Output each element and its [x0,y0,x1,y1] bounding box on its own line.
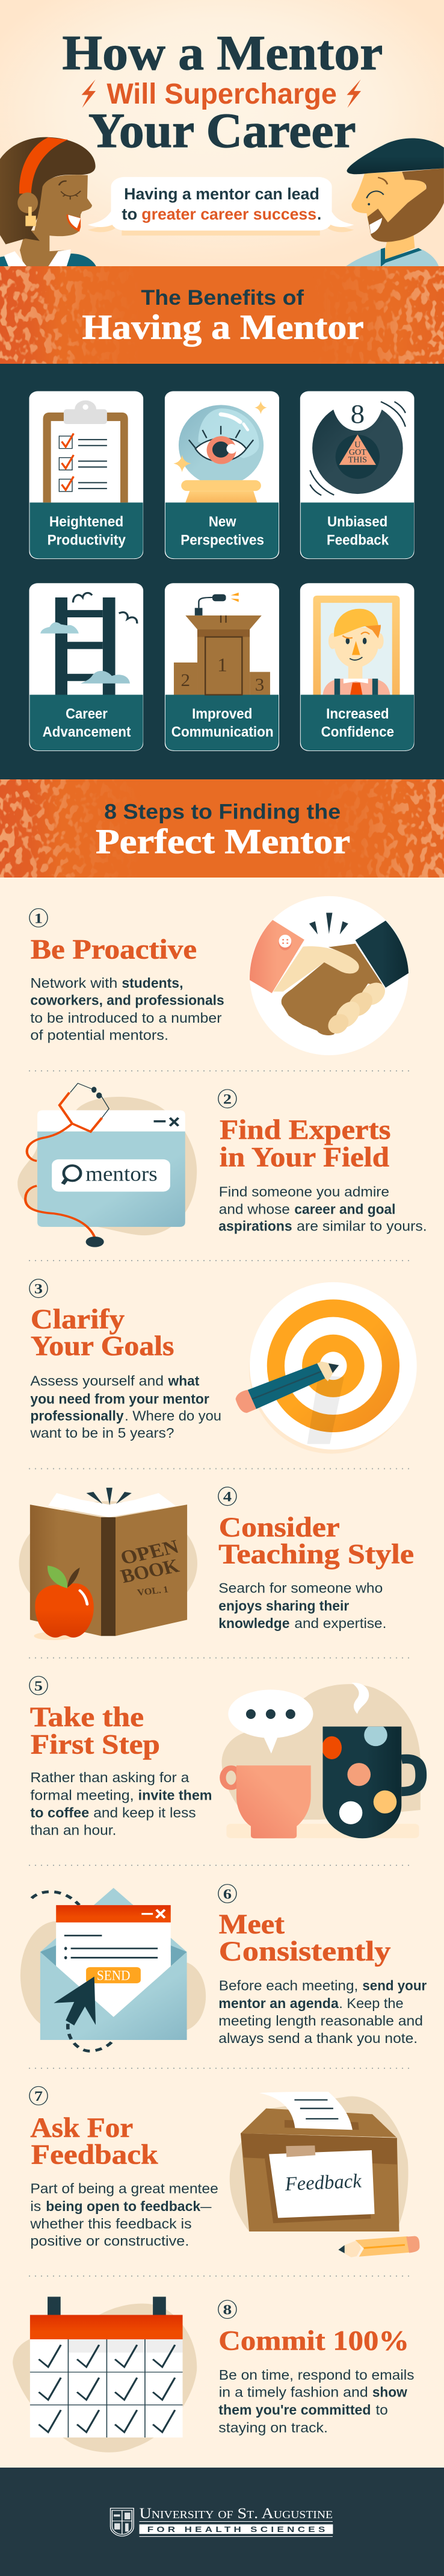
icon: podium with microphone: 3 [255,675,264,694]
step 5: Take the First Step [29,1676,421,1838]
step body: to coffee [30,1804,89,1821]
step title [30,2112,158,2170]
icon: right lightning bolt [347,80,361,108]
step body [218,1977,427,2046]
logo: university crest [111,2508,134,2536]
step body: show [372,2384,407,2400]
label [180,514,264,548]
label: Unbiased [327,514,387,530]
step title: Consider [219,1512,340,1543]
illustration: feedback box: Feedback [284,2169,362,2195]
heading: 8 Steps to Finding the: 8 Steps to Finding the [104,800,341,823]
card: New Perspectives [165,391,279,559]
step body: Find someone you admire [219,1184,389,1200]
step body: Rather than asking for a [30,1770,190,1786]
icon: magic 8-ball: GOT [349,448,366,457]
step body: Before each meeting, [219,1977,358,1994]
step body: — [200,2198,212,2214]
number badge 2 [218,1090,236,1108]
step body: Part of being a great mentee [30,2180,218,2197]
label: Confidence [321,725,394,740]
step title: First Step [31,1729,160,1760]
step body: aspirations [218,1218,292,1234]
number badge 5: 5 [34,1678,43,1694]
speech text [122,186,321,223]
step body: is [30,2198,41,2214]
number badge 1 [29,909,48,927]
step title: Consistently [219,1936,390,1967]
icon: target with pencil [236,1282,417,1454]
step 6: Meet Consistently [20,1885,427,2051]
label: Productivity [48,532,126,548]
number badge 4: 4 [223,1489,232,1505]
step body: than an hour. [30,1822,116,1838]
step body [218,1580,386,1631]
step body: what [168,1373,200,1389]
illustration: open book with apple: BOOK [118,1555,182,1587]
step body: always send a thank you note. [218,2030,418,2046]
number badge 4 [218,1487,236,1506]
icon: magic 8-ball: THIS [348,455,367,464]
step body: and keep it less [93,1804,196,1821]
card: Heightened Productivity [29,391,143,559]
illustration: email envelope: SEND [97,1967,130,1983]
step body [218,1184,427,1234]
step body: mentor an agenda [218,1995,339,2012]
step title: Take the [30,1701,144,1733]
step title [220,1114,390,1173]
step title [219,1909,390,1967]
label: Increased [326,706,389,722]
step body: enjoys sharing their [218,1598,349,1614]
step body: . Keep the [339,1995,404,2012]
step body: whether this feedback is [29,2216,192,2231]
step body: formal meeting, [30,1787,134,1803]
heading: Perfect Mentor: Perfect Mentor [96,823,350,861]
step body: of potential mentors. [30,1027,168,1043]
illustration: search window with stethoscope: mentors [85,1162,158,1185]
step body: positive or constructive. [30,2233,189,2249]
card: Unbiased Feedback [300,391,414,559]
illustration: calendar [13,2297,197,2453]
step body [30,1770,212,1838]
step title: Clarify [31,1303,125,1335]
icon: magic 8-ball [310,399,405,495]
label [327,514,389,548]
number badge 7: 7 [34,2089,43,2104]
step title [218,1512,414,1570]
icon: small pencil [338,2236,419,2257]
icon: magic 8-ball: U [354,440,361,449]
step title [31,1303,174,1362]
icon: podium with microphone [174,593,270,695]
step body [30,975,224,1043]
heading: Having a Mentor: Having a Mentor [82,308,364,347]
speech text: Having a mentor can lead [124,186,319,203]
label: New [209,514,236,530]
step title: Teaching Style [218,1539,414,1570]
speech text: to [122,205,137,223]
step body: knowledge [218,1615,289,1631]
label: Feedback [327,532,389,548]
step body: being open to feedback [46,2198,201,2214]
step title: Be Proactive [31,934,197,965]
step body: them you're committed [218,2402,371,2418]
card: Improved Communication [165,583,279,751]
step body: are similar to yours. [297,1218,427,1234]
icon: left lightning bolt [82,80,96,108]
number badge 3: 3 [34,1281,43,1297]
step body: . Where do you [125,1408,221,1424]
number badge 1: 1 [34,911,43,926]
label: Career [66,706,108,722]
speech text: . [317,205,321,223]
icon: podium with microphone: 1 [217,655,227,676]
illustration: search window with stethoscope [17,1084,197,1247]
step body: and whose [219,1201,290,1217]
icon: crystal ball with eye [173,401,267,502]
label: Advancement [43,725,131,740]
step title: in Your Field [220,1141,389,1173]
number badge 6: 6 [223,1886,232,1902]
step title: Meet [219,1909,285,1940]
footer [0,2468,444,2576]
step body: professionally [30,1408,124,1424]
step body: send your [362,1977,427,1994]
card: Increased Confidence [300,583,414,751]
label: Communication [171,725,274,740]
step 3: Clarify Your Goals [29,1279,417,1454]
step body: to be introduced to a number [30,1010,222,1026]
label: Heightened [49,514,123,530]
step title: Your Goals [31,1330,174,1362]
label [43,706,131,740]
illustration: open book with apple [19,1488,197,1640]
number badge 7 [29,2086,48,2105]
label [321,706,394,740]
number badge 6 [218,1885,236,1903]
icon: magic 8-ball: 8 [351,399,365,429]
illustration: woman [0,137,96,267]
step body [218,2367,414,2436]
step 7: Ask For Feedback [29,2086,419,2257]
label [48,514,126,548]
step body: Network with [30,975,117,991]
card: Career Advancement [29,583,143,751]
step title [30,1701,160,1760]
title line: How a Mentor: How a Mentor [63,26,383,80]
icon: podium with microphone: 2 [180,670,190,690]
step body: in a timely fashion and [219,2384,368,2400]
number badge 2: 2 [223,1091,232,1107]
step title: Commit 100% [218,2325,409,2356]
illustration: open book with apple: VOL. 1 [137,1584,169,1598]
step body: invite them [138,1787,212,1803]
icon: mirror portrait [313,596,399,695]
panel: steps header band [0,779,444,878]
label: Improved [192,706,252,722]
step body [29,1373,221,1441]
step body: want to be in 5 years? [29,1425,174,1441]
step body: and expertise. [294,1615,386,1631]
number badge 8 [218,2300,236,2318]
step body [29,2180,218,2249]
illustration: coffee mugs with speech bubble [221,1683,421,1838]
title line: Your Career: Your Career [88,104,356,158]
label: Perspectives [180,532,264,548]
step body: staying on track. [218,2420,328,2436]
icon: ladder [40,593,137,695]
illustration: email envelope [20,1888,206,2051]
illustration: open book with apple: OPEN [118,1535,182,1568]
step title: Find Experts [220,1114,390,1146]
speech bubble [88,177,354,235]
logo: university name: University of St. Augustine [140,2505,333,2522]
step body: Assess yourself and [30,1373,164,1389]
speech text: greater career success [141,205,316,223]
illustration: man [345,138,444,267]
step body: career and goal [294,1201,395,1217]
illustration: feedback box [230,2092,419,2257]
label [171,706,274,740]
heading: The Benefits of: The Benefits of [141,286,304,310]
step body: to [375,2402,388,2418]
title line: Will Supercharge: Will Supercharge [106,78,337,110]
icon: handshake [250,896,409,1055]
panel: benefits grid [0,364,444,779]
panel: hero [0,0,444,267]
step 2: Find Experts in Your Field [17,1084,427,1247]
step body: students, [122,975,183,991]
step title: Ask For [30,2112,133,2143]
step body: you need from your mentor [30,1391,209,1407]
number badge 8: 8 [223,2302,232,2318]
step body: Search for someone who [218,1580,383,1596]
number badge 5 [29,1676,48,1695]
icon: clipboard [43,401,128,502]
step title: Feedback [31,2139,158,2170]
step 4: Consider Teaching Style [19,1487,414,1640]
step body: coworkers, and professionals [30,992,224,1008]
step 1: Be Proactive [29,896,409,1055]
number badge 3 [29,1279,48,1297]
panel: benefits header band [0,266,444,364]
logo: for health sciences band: FOR HEALTH SCIENCES [147,2525,325,2534]
step 8: Commit 100% [13,2297,414,2453]
